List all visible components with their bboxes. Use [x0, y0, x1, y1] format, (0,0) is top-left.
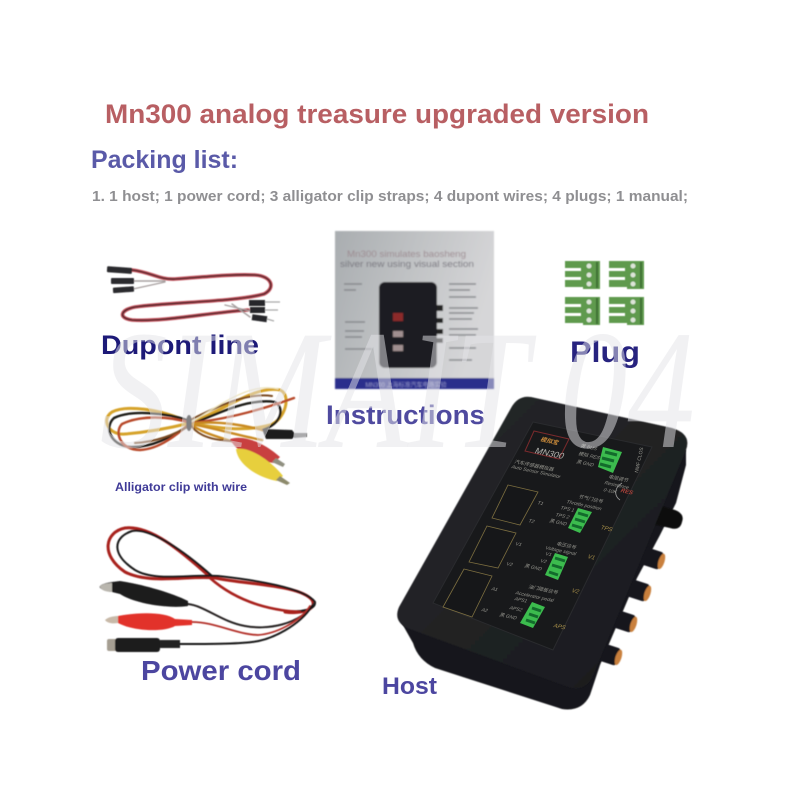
display T: T2 — [527, 518, 536, 525]
V labels: V2 — [539, 558, 548, 565]
TPS labels: Throttle position — [565, 499, 603, 512]
photo: instruction manual: silver new using visual section — [340, 259, 474, 270]
label: power cord: Power cord — [141, 655, 301, 686]
orange-tipped knob 4 — [593, 641, 624, 667]
resistance control labels: Resistance — [603, 480, 630, 491]
display V: V1 — [514, 541, 523, 548]
logo box: 模拟宝 — [539, 436, 560, 446]
label: host: Host — [382, 673, 437, 700]
red clip — [105, 613, 192, 630]
barrel plug — [107, 638, 180, 652]
TPS labels: 节气门信号 — [577, 494, 605, 505]
plug 2 — [609, 261, 644, 289]
title: Mn300 analog treasure upgraded version — [105, 99, 649, 129]
label: alligator clip with wire: Alligator clip with wire — [115, 482, 247, 494]
V labels: 黑 GND — [523, 563, 543, 572]
V labels: Voltage signal — [544, 545, 577, 557]
photo: host device: Auto Sensor Simulator — [510, 464, 562, 480]
V labels — [523, 541, 597, 595]
display V — [469, 526, 523, 568]
inner panel — [433, 422, 652, 650]
orange-tipped knob 3 — [608, 608, 639, 634]
APS labels: 油门踏板信号 — [527, 584, 560, 596]
logo box: MN300 — [533, 446, 566, 461]
display A — [443, 569, 499, 617]
top connector labels: 模拟 RES — [577, 451, 602, 461]
lower shell — [400, 420, 686, 709]
APS labels: Accelerator pedal — [514, 590, 555, 604]
photo: instruction manual: Mn300 simulates baosheng — [347, 249, 466, 260]
heading: packing list: Packing list: — [91, 146, 238, 174]
resistance control labels: RES — [619, 488, 634, 496]
display T — [492, 485, 545, 525]
APS labels: 黑 GND — [498, 612, 518, 621]
APS labels: APS1 — [513, 596, 529, 604]
photo: instruction manual: MN300 上海标准汽车电路实验 — [365, 381, 447, 389]
resistance control labels: 0-10K — [602, 487, 619, 496]
V labels: 电压信号 — [555, 541, 578, 551]
label: plug: Plug — [570, 336, 640, 369]
photo: green plugs — [565, 261, 644, 325]
subtitle text: 汽车传感器模拟器 — [513, 459, 555, 473]
photo: dupont wires — [107, 266, 280, 322]
top connector labels — [575, 443, 602, 468]
V labels: V1 — [586, 554, 597, 561]
black clip — [100, 581, 188, 607]
label: dupont line: Dupont line — [101, 330, 259, 360]
TPS labels: TPS 1 — [559, 505, 576, 514]
TPS labels — [548, 494, 613, 533]
TPS labels: TPS 2 — [554, 512, 571, 521]
V labels: V2 — [570, 588, 581, 595]
resistance control labels — [602, 474, 634, 500]
label: instructions: Instructions — [326, 400, 485, 430]
side label: NMF CLOS — [634, 446, 645, 473]
APS labels: APS — [552, 623, 567, 631]
logo box — [525, 431, 569, 461]
display V: V2 — [505, 561, 514, 568]
orange-tipped knob 1 — [636, 545, 667, 571]
photo: power cord — [100, 528, 315, 652]
plug 4 — [609, 297, 644, 325]
resistance control labels: 电阻调节 — [607, 474, 630, 484]
orange-tipped knob 2 — [622, 577, 653, 603]
rotary knob — [652, 505, 683, 529]
V labels: V1 — [544, 551, 553, 558]
display A: A2 — [480, 607, 489, 614]
TPS labels: 黑 GND — [548, 518, 568, 527]
photo: host device — [397, 397, 687, 709]
plug 3 — [565, 297, 600, 325]
packing list text: 1. 1 host; 1 power cord; 3 alligator clip straps; 4 dupont wires; 4 plugs; 1 manual; — [92, 188, 688, 205]
photo: instruction manual — [335, 231, 494, 389]
display T: T1 — [536, 500, 545, 507]
APS labels — [498, 584, 567, 631]
green connectors — [520, 447, 622, 628]
top connector labels: 黄 BUS — [579, 443, 599, 452]
plug 1 — [565, 261, 600, 289]
photo: alligator clip wires — [107, 388, 307, 485]
TPS labels: TPS — [599, 525, 613, 533]
top connector labels: 黑 GND — [575, 459, 595, 468]
display A: A1 — [490, 586, 499, 593]
APS labels: APS2 — [508, 605, 524, 613]
top face — [397, 397, 687, 688]
